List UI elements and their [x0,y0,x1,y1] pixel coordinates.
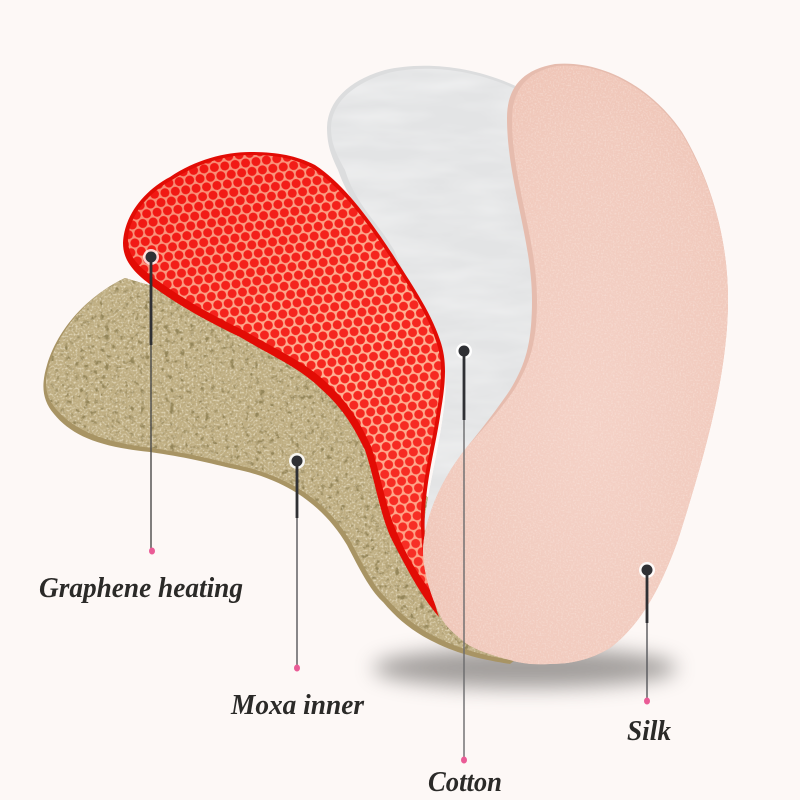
ground shadow [373,648,677,688]
callout: cotton: Cotton [428,766,502,798]
callout: silk: Silk [627,715,671,747]
layer: moxa inner [43,278,540,664]
cotton top surface [331,69,560,530]
callout: moxa inner: Moxa inner [230,689,365,721]
callout: graphene heating [39,249,243,604]
callout: graphene heating: Graphene heating [39,572,243,604]
callout: silk [627,562,671,747]
layer: silk [423,64,728,664]
layer: graphene heating [123,152,445,617]
layer: cotton [327,66,560,530]
callout: cotton [428,343,502,798]
callout: moxa inner [230,453,365,721]
